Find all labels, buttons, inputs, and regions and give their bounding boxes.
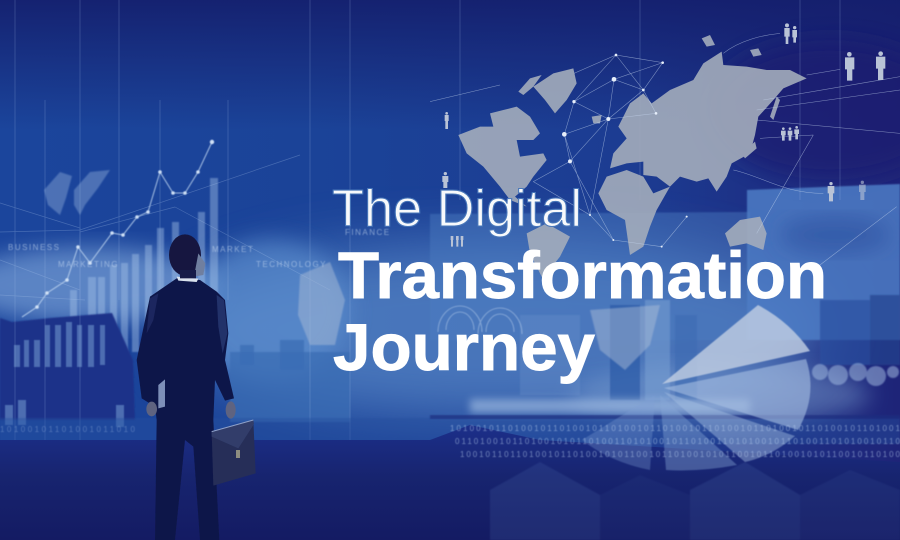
left bar chart: [70, 178, 218, 353]
chart labels: TECHNOLOGY: [256, 260, 327, 269]
radar circles: [438, 306, 522, 334]
city skyline center: [520, 295, 900, 400]
pie wedge: bottom: [660, 395, 737, 470]
title line 1: The Digital: [332, 180, 582, 238]
hands and book: [146, 379, 236, 419]
floor hexagon pattern: [490, 462, 900, 540]
binary data rows: [0, 424, 900, 459]
chart labels: MARKETING: [58, 260, 119, 269]
chart labels: FINANCE: [345, 228, 391, 237]
pie wedge: right: [664, 359, 810, 430]
left dark city block: [0, 313, 350, 422]
network lines: [430, 33, 900, 270]
chart labels: MARKET: [212, 245, 254, 254]
small world map left: [44, 170, 110, 215]
binary data rows: 10100101101001011010: [0, 425, 136, 434]
briefcase: [212, 420, 256, 486]
title line 3: Journey: [333, 310, 595, 384]
pie chart: [582, 305, 810, 470]
left grid lines: [0, 0, 840, 440]
binary data rows: 1010010110100101101001011010010110100101101001011010010110100101101001: [450, 424, 900, 433]
floor: [0, 425, 900, 540]
legs and jacket: [137, 278, 234, 540]
people icons: [442, 23, 885, 247]
binary data rows: 1001011011010010110100101011001011010010101100101101001010110010110100: [460, 450, 900, 459]
chart labels: BUSINESS: [8, 243, 60, 252]
bokeh lights: [812, 363, 899, 386]
title line 2: Transformation: [338, 238, 827, 312]
chart labels: [8, 228, 391, 269]
head: [169, 234, 205, 278]
left city bars: [5, 322, 124, 427]
businessman: [137, 234, 256, 540]
pie wedge: top: [662, 305, 810, 384]
network nodes: [562, 54, 688, 248]
title: [332, 180, 827, 384]
left line chart: [22, 140, 214, 317]
pie wedge: lower right: [664, 392, 795, 462]
faint map center left: [298, 262, 660, 370]
pie wedge: lower left: [582, 395, 655, 470]
horizon: [0, 399, 900, 444]
continents: [458, 35, 807, 280]
world map: [430, 23, 900, 280]
right light band with clouds: [430, 184, 900, 340]
sleeve highlights: [217, 295, 227, 353]
binary data rows: 0110100101101001010110100110101001011010011010100101101001101010010110: [455, 437, 900, 446]
collar: [177, 277, 198, 282]
